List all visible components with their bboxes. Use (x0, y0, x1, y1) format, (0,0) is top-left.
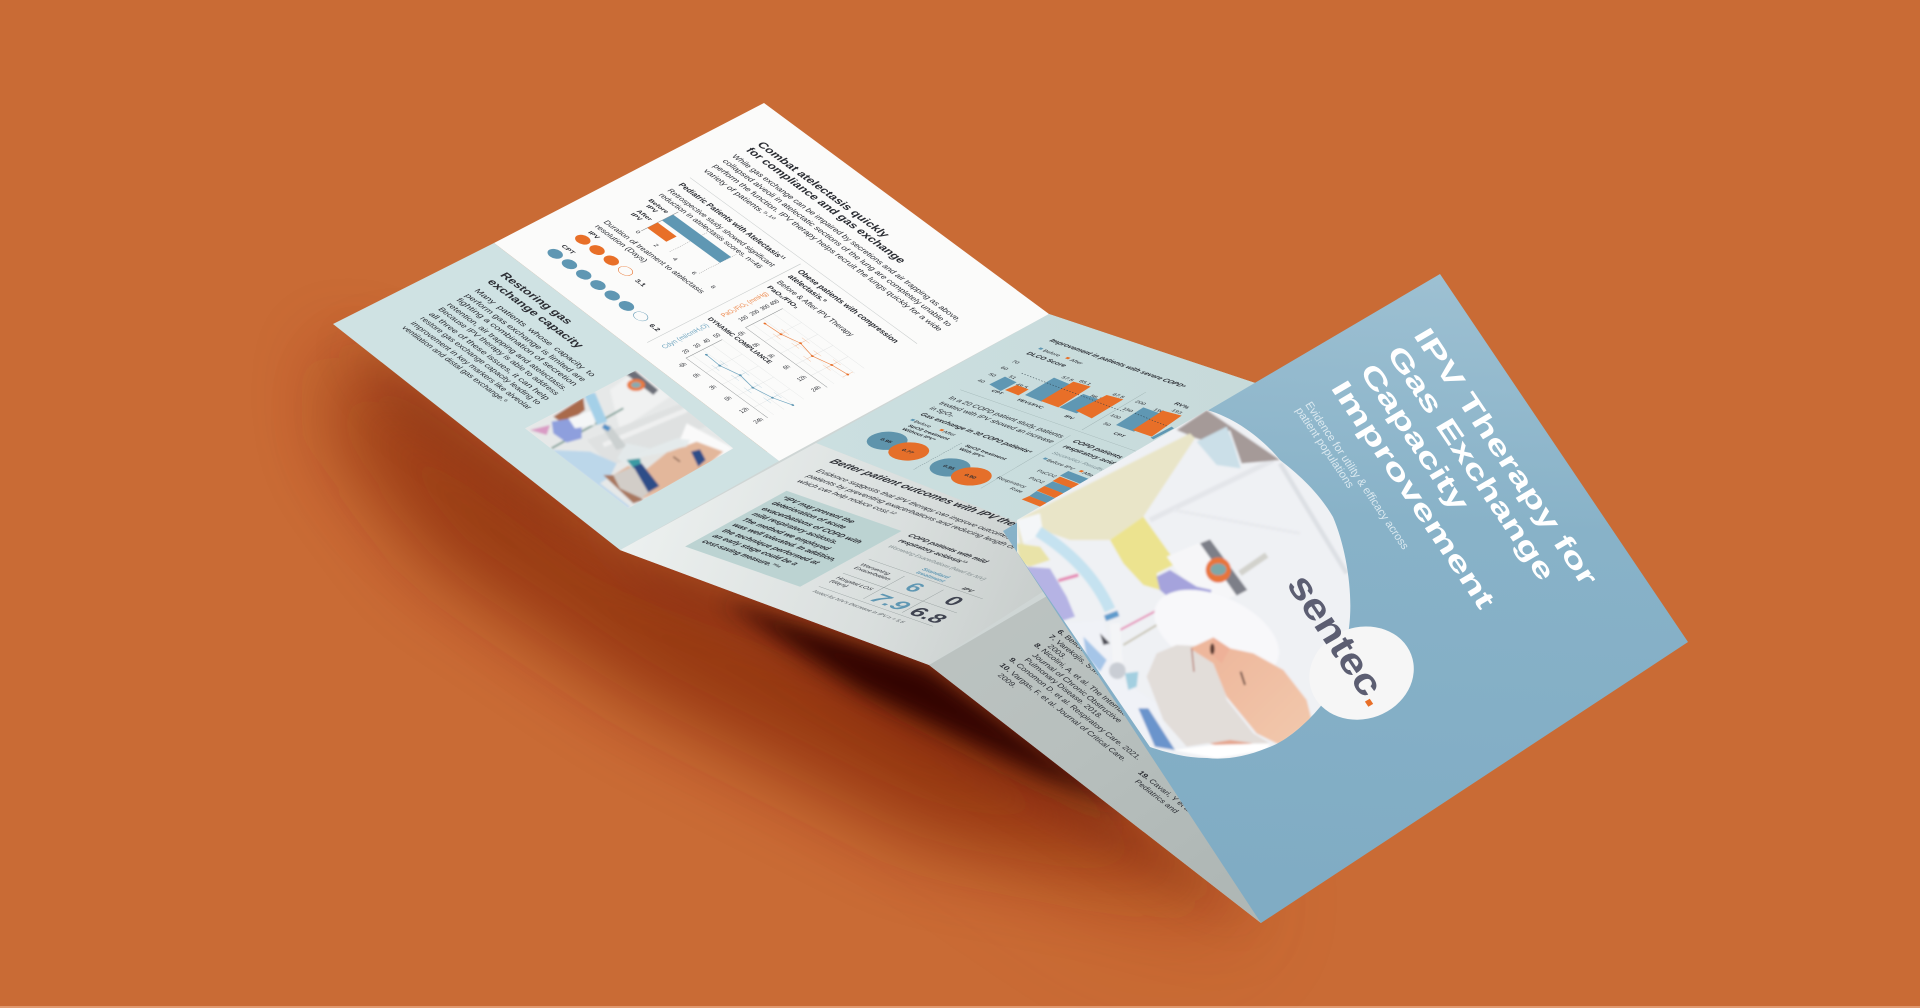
line chart: PaO2/FiO2: PaO₂/FIO₂ (765, 285, 801, 310)
charts: improvement in severe COPD: 100 (1108, 414, 1122, 420)
section: pediatric patients (544, 181, 794, 333)
table: COPD exacerbations and length of stay: Exacerbation (852, 566, 893, 582)
charts: improvement in severe COPD: 56.1 (1088, 394, 1103, 401)
charts: improvement in severe COPD: After (1067, 359, 1084, 366)
line chart: dynamic compliance: 6h (723, 396, 734, 402)
chart labels: COPD patients with mild acidosis: PaCO2 (1035, 469, 1058, 479)
charts: improvement in severe COPD: 193 (1169, 409, 1183, 415)
charts: improvement in severe COPD: 70 (1009, 360, 1021, 365)
table: COPD exacerbations and length of stay: 0 (938, 594, 970, 609)
chart: gas exchange circles: 0.77 (899, 448, 915, 455)
text: references list: Pediatrics and (1132, 778, 1181, 814)
callout: quote box: an early stage could be a (710, 533, 802, 567)
charts: improvement in severe COPD: Improvement in patients with severe COPD⁸ (1047, 338, 1189, 389)
line chart: PaO2/FiO2: 3h (767, 353, 777, 360)
text: references list: 6. Bellone, A. et al. Respiratory Care. 2000. (1055, 628, 1186, 729)
chart: gas exchange circles: SpO2 treatment (906, 424, 951, 441)
line chart: PaO2/FiO2: 6h (782, 365, 792, 371)
line chart: dynamic compliance: 3h (708, 385, 719, 391)
charts: improvement in severe COPD: 60 (998, 366, 1009, 371)
dot chart: IPV days (572, 229, 658, 288)
line chart: PaO2/FiO2: 24h (810, 385, 823, 393)
text: evidence paragraph: which can help reduce cost.¹² (795, 479, 899, 516)
text: restoring paragraph: retention, air trapping and atelectasis. (445, 302, 570, 392)
dot chart: CPT days (544, 243, 673, 333)
line chart: dynamic compliance (652, 316, 818, 425)
text: intro paragraph: collapsed alveoli in atelectatic sections of the lung are completely unable to (720, 158, 954, 328)
charts: improvement in severe COPD: 150 (1120, 407, 1134, 413)
text: restoring paragraph: all three of these issues, it can help (427, 311, 552, 401)
callout: quote box: cost-saving measure.”¹⁴ (700, 538, 784, 570)
line chart: PaO2/FiO2: 200 (749, 309, 762, 317)
section: obese patients: atelectasis.⁹ (786, 273, 830, 304)
section: obese patients (651, 269, 910, 425)
callout: quote box: The method we employed (739, 517, 834, 552)
panel: front cover (1003, 274, 1688, 923)
title: IPV Therapy for Gas Exchange Capacity Improvement (1323, 323, 1603, 640)
bar charts: DLCO and RV percent bars (989, 373, 1182, 507)
table: COPD exacerbations and length of stay: IPV (960, 587, 976, 594)
dot chart: CPT days: CPT (559, 244, 576, 255)
title: IPV Therapy for Gas Exchange Capacity Improvement: Capacity (1353, 359, 1475, 517)
bar chart: days before and after IPV: 4 (671, 257, 679, 262)
charts: improvement in severe COPD: 67.5 (1110, 393, 1126, 399)
bar chart: days before and after IPV: After (635, 209, 654, 222)
charts: improvement in severe COPD: 50 (1101, 422, 1112, 427)
text: references list: 10. Vargas, F. et al. Journal of Critical Care. (997, 662, 1129, 763)
text: restoring paragraph: improvement in key markers like alveolar (408, 320, 534, 411)
section: pediatric patients: Pediatric Patients with Atelectasis¹¹ (676, 182, 788, 261)
title: IPV Therapy for Gas Exchange Capacity Improvement: IPV Therapy for (1407, 323, 1603, 591)
heading: restoring gas exchange: Restoring gas (497, 271, 576, 326)
charts: improvement in severe COPD: Before (1040, 349, 1062, 358)
charts: improvement in severe COPD: IPV (1062, 415, 1076, 421)
panel: middle page content (673, 337, 1301, 632)
chart: gas exchange circles (850, 409, 1041, 490)
bar chart: days before and after IPV: 0 (633, 230, 642, 235)
charts: improvement in severe COPD: RV% (1172, 402, 1192, 410)
photo: patient with mask (525, 370, 733, 508)
chart: gas exchange circles: 0.90 (962, 473, 977, 480)
table: COPD exacerbations and length of stay: 6 (899, 580, 931, 595)
subtitle: patient populations (1292, 406, 1356, 490)
text: SpO2 study summary: In a 20 COPD patient study, patients (946, 395, 1067, 439)
chart: gas exchange circles: SpO2 treatment (963, 444, 1008, 461)
text: intro paragraph: perform the function. IPV therapy helps recruit the lungs quickly for a wide (711, 163, 945, 332)
line chart: PaO2/FiO2: -6h (736, 331, 748, 338)
table: COPD exacerbations and length of stay: respiratory acidosis¹³ (896, 538, 970, 565)
line chart: dynamic compliance: -6h (677, 362, 689, 369)
bar chart: days before and after IPV: IPV (629, 212, 644, 222)
bar chart: days before and after IPV: Before (646, 198, 670, 215)
text: restoring paragraph: Because IPV therapy is able to address (436, 306, 562, 397)
chart: gas exchange circles: Gas exchange in 30 COPD patients⁸ (918, 412, 1035, 454)
cover content (1167, 323, 1608, 738)
callout: quote box (685, 491, 902, 587)
section: obese patients: Obese patients with compression (795, 269, 901, 344)
photo: cover clinician and patient (1017, 410, 1350, 759)
table: COPD exacerbations and length of stay: 7.9 (864, 591, 916, 613)
callout: quote box: deterioration of acute (769, 500, 850, 530)
charts: improvement in severe COPD: 200 (1133, 400, 1147, 406)
line chart: PaO2/FiO2: 0h (752, 342, 762, 349)
line chart: dynamic compliance: 40 (702, 338, 712, 345)
logo: sentec: sentec . (1278, 567, 1398, 714)
line chart: PaO2/FiO2: 400 (769, 299, 782, 307)
charts: improvement in severe COPD: 57.5 (1059, 376, 1075, 382)
bar chart: days before and after IPV (614, 196, 755, 290)
charts: improvement in severe COPD: FEV1/FVC (1015, 398, 1045, 410)
heading: restoring gas exchange: exchange capacity (484, 277, 587, 350)
panel: upper page content (398, 139, 991, 493)
table: COPD exacerbations and length of stay: treatment (914, 571, 948, 584)
text: duration caption: Duration of treatment to atelectasis (601, 219, 707, 295)
text: references list: Journal of Chronic Obstructive (1030, 652, 1125, 724)
table: COPD exacerbations and length of stay: Worsening Exacerbations (Need for NIV) (886, 545, 988, 581)
line chart: dynamic compliance: 12h (738, 407, 751, 415)
line chart: PaO2/FiO2: 300 (759, 304, 772, 312)
charts: improvement in severe COPD: 50 (986, 373, 997, 378)
text: duration caption: resolution (Days) (593, 223, 650, 264)
text: restoring paragraph: restore gas exchange capacity leading to (418, 315, 544, 406)
dot chart: IPV days: 3.1 (633, 279, 647, 288)
logo: sentec (1252, 551, 1433, 738)
charts: improvement in severe COPD (960, 338, 1295, 474)
title: IPV Therapy for Gas Exchange Capacity Improvement: Gas Exchange (1380, 341, 1561, 586)
panel: upper folded page background (333, 103, 1049, 550)
line chart: dynamic compliance: 50 (712, 333, 723, 339)
charts: improvement in severe COPD: 40 (975, 379, 986, 384)
text: references list: 8. Nicolini, A. et al. The International (1032, 642, 1143, 726)
text: references list: Pulmonary Disease. 2018. (1022, 657, 1105, 720)
dot chart: IPV days: IPV (586, 230, 601, 240)
subtitle: Evidence for utility & efficacy across (1302, 400, 1410, 552)
bar chart: days before and after IPV: IPV (644, 204, 659, 214)
chart: gas exchange circles: 0.95 (941, 464, 956, 471)
table: COPD exacerbations and length of stay (807, 533, 1029, 632)
chart labels: COPD patients with mild acidosis: After IPV (1080, 471, 1107, 482)
line chart: dynamic compliance: 24h (753, 417, 766, 425)
title: IPV Therapy for Gas Exchange Capacity Improvement: Improvement (1325, 376, 1501, 614)
bar chart: days before and after IPV: 8 (709, 285, 717, 290)
panel: teal charts section background (816, 314, 1300, 555)
charts: improvement in severe COPD: 190 (1151, 408, 1165, 414)
text: references list: 9. Conomon D. et al. Respiratory Care. 2021. (1007, 656, 1144, 761)
callout: quote box: the technique performed at (719, 528, 824, 566)
text: SpO2 study summary: treated with IPV showed an increase (937, 400, 1058, 444)
dot chart: CPT days: 6.2 (647, 323, 661, 332)
text: restoring paragraph: fighting a combination of secretion (454, 297, 580, 387)
chart labels: COPD patients with mild acidosis: COPD patients with mild (1070, 439, 1158, 471)
charts: improvement in severe COPD: DLCO Score (1024, 351, 1069, 368)
chart labels: COPD patients with mild acidosis: PaO2 (1026, 477, 1046, 484)
line chart: dynamic compliance: 0h (692, 373, 703, 379)
charts: improvement in severe COPD: CPT (989, 389, 1005, 396)
callout: quote box: mild respiratory acidosis. (749, 511, 842, 545)
line chart: dynamic compliance: 30 (693, 343, 703, 350)
charts: improvement in severe COPD: CPT (1111, 432, 1127, 439)
chart: gas exchange circles: With IPV⁹ (957, 448, 986, 459)
chart labels: COPD patients with mild acidosis: respiratory acidosis⁵ (1061, 444, 1134, 471)
text: references list: 2009. (996, 672, 1019, 689)
text: references list: 7. Varekojis, S.M. et al. Respiratory Care. (1046, 633, 1172, 729)
table: COPD exacerbations and length of stay: COPD patients with mild (905, 533, 991, 564)
text: references list: 19. Cavari, Y et al. (1136, 769, 1196, 815)
table: COPD exacerbations and length of stay: Standard (920, 567, 952, 580)
chart labels: COPD patients with mild acidosis (987, 437, 1158, 513)
chart labels: COPD patients with mild acidosis: Rate (1007, 487, 1024, 494)
line chart: dynamic compliance: Cdyn (ml/cmH₂O) (660, 323, 711, 350)
line chart: PaO2/FiO2: 12h (796, 375, 809, 383)
panel: better outcomes section background (620, 443, 1100, 665)
chart: gas exchange circles: Before (911, 420, 933, 429)
charts: improvement in severe COPD: 49.5 (1013, 383, 1029, 390)
text: intro paragraph: While gas exchange can be impaired by secretions and air trapping as above, (730, 153, 964, 323)
text: references list (989, 628, 1254, 820)
table: COPD exacerbations and length of stay: Noted for NIV's Decrease in IPV n = 5.5 (811, 590, 906, 625)
charts: improvement in severe COPD: 51 (1006, 375, 1017, 380)
line chart: dynamic compliance: 20 (681, 349, 692, 355)
text: evidence paragraph: patients by preventing exacerbations and reducing length of stay, (803, 473, 1037, 556)
table: COPD exacerbations and length of stay: Hospital LOS (834, 576, 876, 592)
table: COPD exacerbations and length of stay: (days) (828, 579, 850, 588)
bar chart: days before and after IPV: 2 (652, 243, 659, 248)
chart labels: COPD patients with mild acidosis: Secondary Results (SI) (1049, 451, 1117, 476)
section: pediatric patients: reduction in atelectasis scores. n=46 (657, 192, 766, 270)
line chart: PaO2/FiO2 (710, 285, 877, 393)
text: references list: 2003. (1045, 643, 1069, 660)
line chart: dynamic compliance: DYNAMIC COMPLIANCE (706, 316, 774, 365)
text: restoring paragraph: ventilation and distal gas exchange.⁶ (400, 325, 511, 404)
bars: blood gas stripes (1022, 471, 1092, 507)
panel: brochure backing (620, 314, 1300, 923)
text: SpO2 study summary: in SpO₂. (927, 406, 959, 418)
text: restoring paragraph (400, 288, 598, 415)
panel: references flap (929, 565, 1300, 923)
line chart: PaO2/FiO2: PaO₂/FiO₂ (mmHg) (720, 291, 771, 319)
chart labels: COPD patients with mild acidosis: Before IPV (1044, 459, 1076, 471)
heading: combat atelectasis: Combat atelectasis quickly (754, 140, 893, 239)
callout: quote box: was well tolerated. In addition, (730, 522, 840, 562)
text: intro paragraph: variety of patients.⁹·¹⁰ (701, 168, 778, 222)
section: obese patients: Before & After IPV Therapy (774, 279, 857, 338)
chart: gas exchange circles: Without IPV⁹ (900, 428, 938, 442)
section: pediatric patients: Retrospective study showed significant (665, 187, 778, 268)
charts: improvement in severe COPD: 65.1 (1077, 380, 1092, 386)
text: restoring paragraph: perform gas exchange is limited are (463, 292, 589, 383)
text: restoring paragraph: Many patients whose capacity to (472, 288, 598, 378)
chart labels: COPD patients with mild acidosis: Respiratory (994, 476, 1028, 489)
heading: better patient outcomes: Better patient outcomes with IPV therapy (826, 458, 1043, 536)
line chart: PaO2/FiO2: 100 (738, 315, 751, 323)
bar chart: days before and after IPV: 6 (690, 271, 698, 276)
chart: gas exchange circles: After (940, 430, 957, 437)
cast shadows under brochure (330, 335, 1258, 930)
table: COPD exacerbations and length of stay: Worsening (858, 563, 893, 576)
callout: quote box: “IPV may prevent the (779, 495, 858, 524)
text: evidence paragraph: Evidence suggests that IPV therapy can improve outcomes in COPD (814, 468, 1046, 551)
table: COPD exacerbations and length of stay: 6.8 (903, 605, 953, 626)
heading: combat atelectasis: for compliance and gas exchange (743, 146, 909, 265)
callout: quote box: exacerbations of COPD with (759, 506, 865, 545)
chart: gas exchange circles: 0.95 (878, 438, 893, 444)
